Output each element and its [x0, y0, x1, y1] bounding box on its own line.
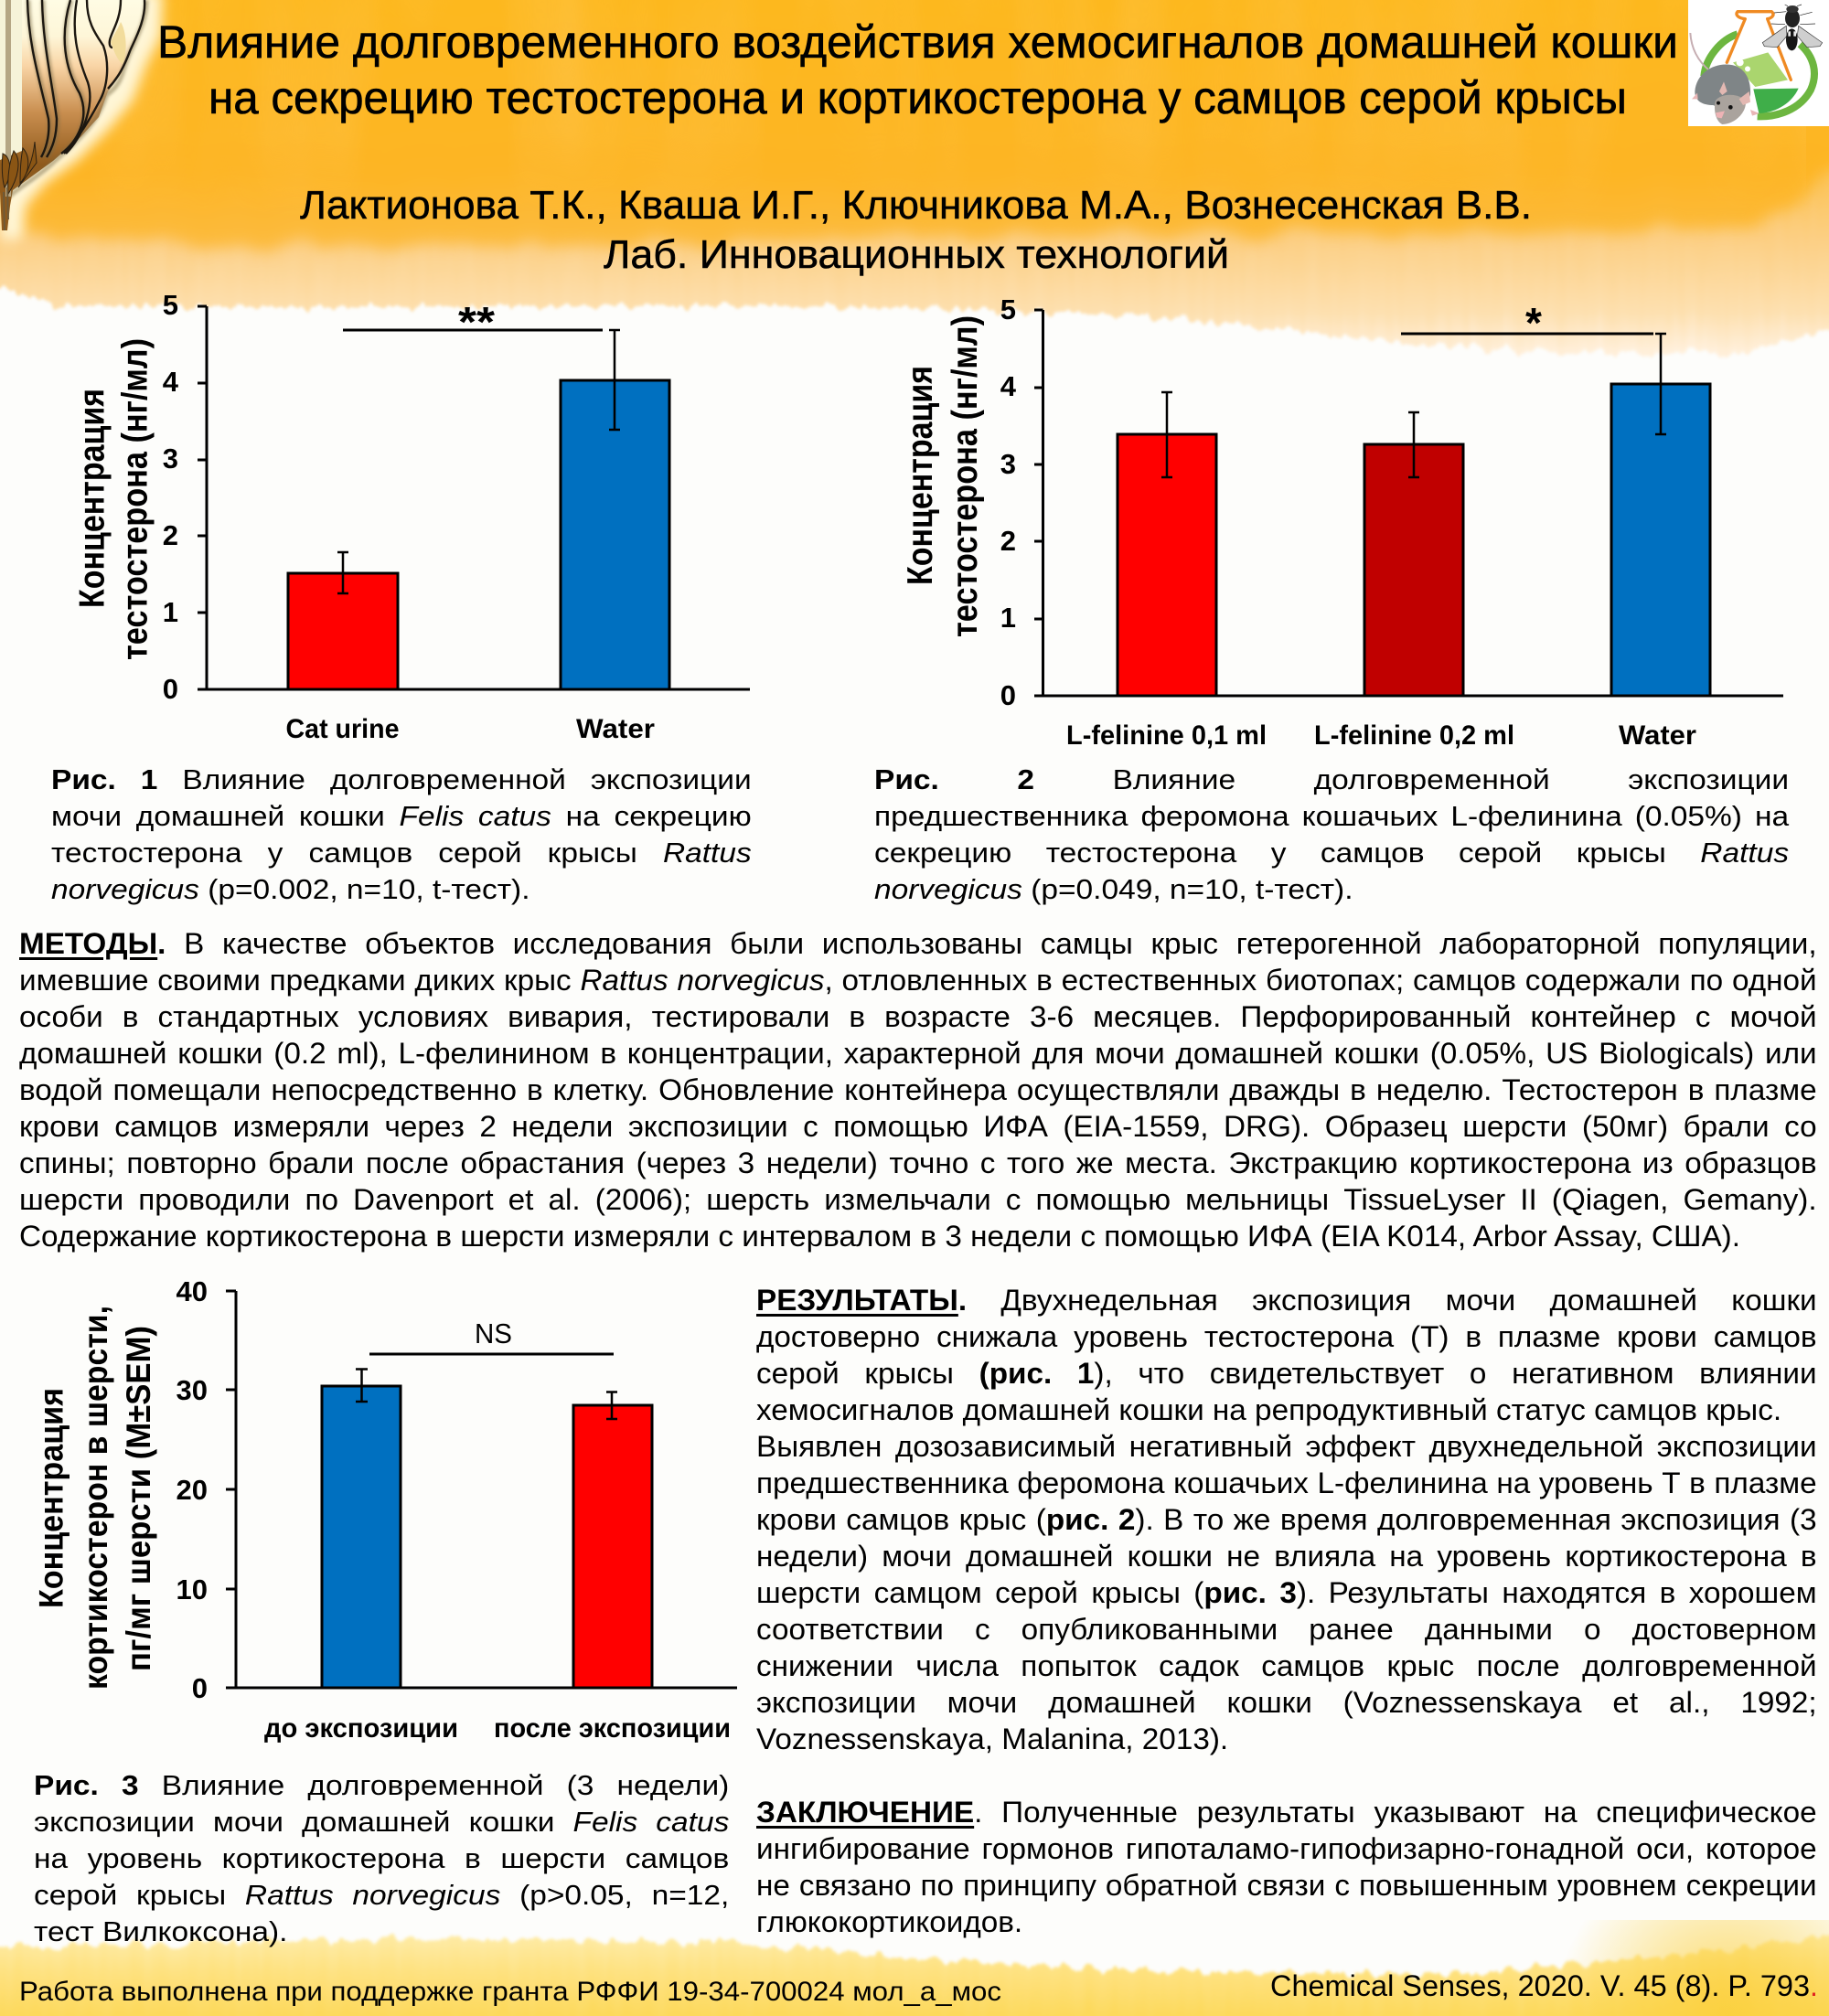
y tick labels: 20: [176, 1474, 208, 1506]
blue bar: water: [561, 380, 669, 689]
y tick labels: 2: [163, 519, 178, 551]
results text: [756, 1284, 1817, 1755]
y axis title: пг/мг шерсти (M±SEM): [120, 1326, 157, 1671]
results text: достоверно снижала уровень тестостерона (Т) в плазме крови самцов: [756, 1320, 1817, 1353]
caption: figure 3: экспозиции мочи домашней кошки Felis catus: [34, 1806, 729, 1838]
top orange watercolor band: [0, 0, 1829, 355]
caption: figure 3: серой крысы Rattus norvegicus (p>0.05, n=12,: [34, 1879, 729, 1911]
methods text: водой помещали непосредственно в клетку. Обновление контейнера осуществляли дважды в неделю. Тестостерон в плазме: [19, 1073, 1817, 1106]
icon: fly: [1762, 5, 1823, 50]
methods text: особи в стандартных условиях вивария, тестировали в возрасте 3-6 месяцев. Перфорированный контейнер с мочой: [19, 1000, 1817, 1033]
authors and laboratory: Лаб. Инновационных технологий: [604, 232, 1229, 277]
axes: [226, 1291, 737, 1688]
caption: figure 2: секрецию тестостерона у самцов серой крысы Rattus: [874, 837, 1789, 869]
y tick labels: 1: [1000, 602, 1016, 634]
caption: figure 2: предшественника феромона кошачьих L-фелинина (0.05%) на: [874, 800, 1789, 832]
significance line: [343, 329, 603, 331]
chart 2: testosterone, L-felinine vs water: [901, 293, 1783, 751]
methods text: спины; повторно брали после обрастания (через 3 недели) точно с того же места. Экстракцию кортикостерона из образцов: [19, 1147, 1817, 1179]
caption: figure 1: Рис. 1 Влияние долговременной экспозиции: [51, 763, 752, 795]
significance label: NS: [475, 1317, 512, 1349]
y tick labels: 10: [176, 1573, 208, 1605]
caption: figure 3: Рис. 3 Влияние долговременной (3 недели): [34, 1769, 729, 1801]
title: Влияние долговременного воздействия хемосигналов домашней кошки: [157, 16, 1678, 68]
caption: figure 3: тест Вилкоксона).: [34, 1915, 287, 1947]
methods text: [19, 927, 1817, 1253]
x labels: после экспозиции: [494, 1713, 731, 1744]
icon: orange flask outline: [1727, 12, 1791, 80]
caption: figure 1: мочи домашней кошки Felis catus на секрецию: [51, 800, 752, 832]
results text: серой крысы (рис. 1), что свидетельствует о негативном влиянии: [756, 1357, 1817, 1390]
error bars: [1161, 334, 1666, 477]
y tick labels: 5: [163, 289, 178, 321]
significance mark: **: [458, 298, 495, 346]
results text: крови самцов крыс (рис. 2). В то же время долговременная экспозиция (3: [756, 1503, 1817, 1536]
title: [157, 16, 1678, 123]
y tick labels: 4: [163, 366, 179, 398]
chart 3: corticosterone in fur before and after exposure: [33, 1275, 737, 1744]
y tick labels: 4: [1000, 370, 1017, 402]
error bars: [356, 1370, 617, 1419]
footer: citation: Chemical Senses, 2020. V. 45 (8). P. 793: [1270, 1969, 1810, 2002]
y axis title: кортикостерон в шерсти,: [77, 1306, 114, 1690]
methods text: крови самцов измеряли через 2 недели экспозиции с помощью ИФА (EIA-1559, DRG). Образец шерсти (50мг) брали со: [19, 1110, 1817, 1143]
y tick labels: 40: [176, 1275, 208, 1307]
results text: снижении числа попыток садок самцов крыс после долговременной: [756, 1649, 1817, 1682]
error bars: [337, 330, 620, 593]
significance line: [1401, 333, 1653, 335]
conclusion text: глюкокортикоидов.: [756, 1905, 1022, 1938]
y axis title: тестостерона (нг/мл): [115, 338, 155, 660]
x labels: Water: [576, 714, 655, 744]
title: на секрецию тестостерона и кортикостерона у самцов серой крысы: [209, 72, 1627, 123]
results text: РЕЗУЛЬТАТЫ. Двухнедельная экспозиция мочи домашней кошки: [756, 1284, 1817, 1317]
conclusion text: [756, 1796, 1817, 1938]
results text: недели) мочи домашней кошки не влияла на уровень кортикостерона в: [756, 1540, 1817, 1573]
conclusion text: ЗАКЛЮЧЕНИЕ. Полученные результаты указывают на специфическое: [756, 1796, 1817, 1829]
y tick labels: 1: [163, 596, 178, 628]
y tick labels: 0: [163, 673, 178, 705]
y tick labels: [163, 289, 179, 705]
caption: figure 2: norvegicus (p=0.049, n=10, t-тест).: [874, 873, 1353, 905]
caption: figure 1: [51, 763, 752, 905]
blue bar: before exposure: [322, 1386, 401, 1688]
y axis title: Концентрация: [901, 366, 940, 585]
y axis title: Концентрация: [33, 1388, 70, 1608]
y tick labels: 2: [1000, 525, 1016, 557]
authors and laboratory: Лактионова Т.К., Кваша И.Г., Ключникова М.А., Вознесенская В.В.: [300, 183, 1532, 228]
results text: соответствии с опубликованными ранее данными о достоверном: [756, 1613, 1817, 1646]
red bar: cat urine: [288, 573, 398, 689]
methods text: Содержание кортикостерона в шерсти измеряли с интервалом в 3 недели с помощью ИФА (EIA K014, Arbor Assay, США).: [19, 1220, 1740, 1253]
y axis title: [33, 1306, 157, 1690]
methods text: имевшие своими предками диких крыс Rattus norvegicus, отловленных в естественных биотопах; самцов содержали по одной: [19, 964, 1817, 997]
results text: Выявлен дозозависимый негативный эффект двухнедельной экспозиции: [756, 1430, 1817, 1463]
y tick labels: 30: [176, 1374, 208, 1406]
y tick labels: 5: [1000, 293, 1016, 325]
y axis title: тестостерона (нг/мл): [946, 315, 985, 637]
y axis title: [73, 338, 155, 660]
footer: citation: .: [1810, 1969, 1818, 2002]
significance mark: *: [1525, 299, 1542, 347]
y tick labels: 3: [163, 443, 178, 475]
methods text: шерсти проводили по Davenport et al. (2006); шерсть измельчали с помощью мельницы TissueLyser II (Qiagen, Gemany).: [19, 1183, 1817, 1216]
y axis title: [901, 315, 985, 637]
red bar: after exposure: [573, 1405, 652, 1688]
x labels: L-felinine 0,1 ml: [1066, 720, 1267, 751]
y tick labels: 3: [1000, 448, 1016, 480]
blue bar: water: [1611, 384, 1710, 696]
y tick labels: [176, 1275, 208, 1704]
x labels: Water: [1619, 720, 1696, 751]
caption: figure 3: [34, 1769, 729, 1947]
y axis title: Концентрация: [73, 389, 112, 608]
x labels: L-felinine 0,2 ml: [1314, 720, 1514, 751]
dark red bar: L-felinine 0.2 ml: [1364, 444, 1463, 696]
icon: green circular emblem: [1704, 34, 1814, 116]
x labels: [285, 714, 655, 744]
conclusion text: не связано по принципу обратной связи с повышенным уровнем секреции: [756, 1869, 1817, 1902]
conclusion text: ингибирование гормонов гипоталамо-гипофизарно-гонадной оси, которое: [756, 1832, 1817, 1865]
results text: хемосигналов домашней кошки на репродуктивный статус самцов крыс.: [756, 1393, 1781, 1426]
y tick labels: [1000, 293, 1017, 711]
x labels: [1066, 720, 1696, 751]
caption: figure 2: Рис. 2 Влияние долговременной экспозиции: [874, 763, 1789, 795]
methods text: МЕТОДЫ. В качестве объектов исследования были использованы самцы крыс гетерогенной лабораторной популяции,: [19, 927, 1817, 960]
footer: grant acknowledgement: Работа выполнена при поддержке гранта РФФИ 19-34-700024 мол_а_мос: [19, 1977, 1001, 2007]
axes: [1034, 310, 1783, 696]
significance line: [369, 1353, 614, 1355]
results text: предшественника феромона кошачьих L-фелинина на уровень Т в плазме: [756, 1467, 1817, 1499]
results text: экспозиции мочи домашней кошки (Voznessenskaya et al., 1992;: [756, 1686, 1817, 1719]
x labels: до экспозиции: [264, 1713, 458, 1744]
caption: figure 1: тестостерона у самцов серой крысы Rattus: [51, 837, 752, 869]
x labels: [264, 1713, 731, 1744]
icon: rat: [1690, 33, 1759, 124]
caption: figure 3: на уровень кортикостерона в шерсти самцов: [34, 1842, 729, 1874]
chart 1: testosterone, cat urine vs water: [73, 289, 750, 744]
caption: figure 1: norvegicus (p=0.002, n=10, t-тест).: [51, 873, 529, 905]
authors and laboratory: [300, 183, 1532, 277]
y tick labels: 0: [192, 1672, 208, 1704]
y tick labels: 0: [1000, 679, 1016, 711]
x labels: Cat urine: [285, 714, 399, 744]
axes: [198, 306, 750, 689]
methods text: домашней кошки (0.2 ml), L-фелинином в концентрации, характерной для мочи домашней кошки (0.05%, US Biologicals) или: [19, 1037, 1817, 1070]
bottom yellow watercolor band: [0, 1920, 1829, 2016]
icon: stage curtain corner: [0, 0, 163, 240]
results text: Voznessenskaya, Malanina, 2013).: [756, 1723, 1228, 1755]
caption: figure 2: [874, 763, 1789, 905]
icon: laboratory logo with flask, rat and fly: [1688, 0, 1829, 126]
results text: шерсти самцом серой крысы (рис. 3). Результаты находятся в хорошем: [756, 1576, 1817, 1609]
red bar: L-felinine 0.1 ml: [1118, 434, 1216, 696]
